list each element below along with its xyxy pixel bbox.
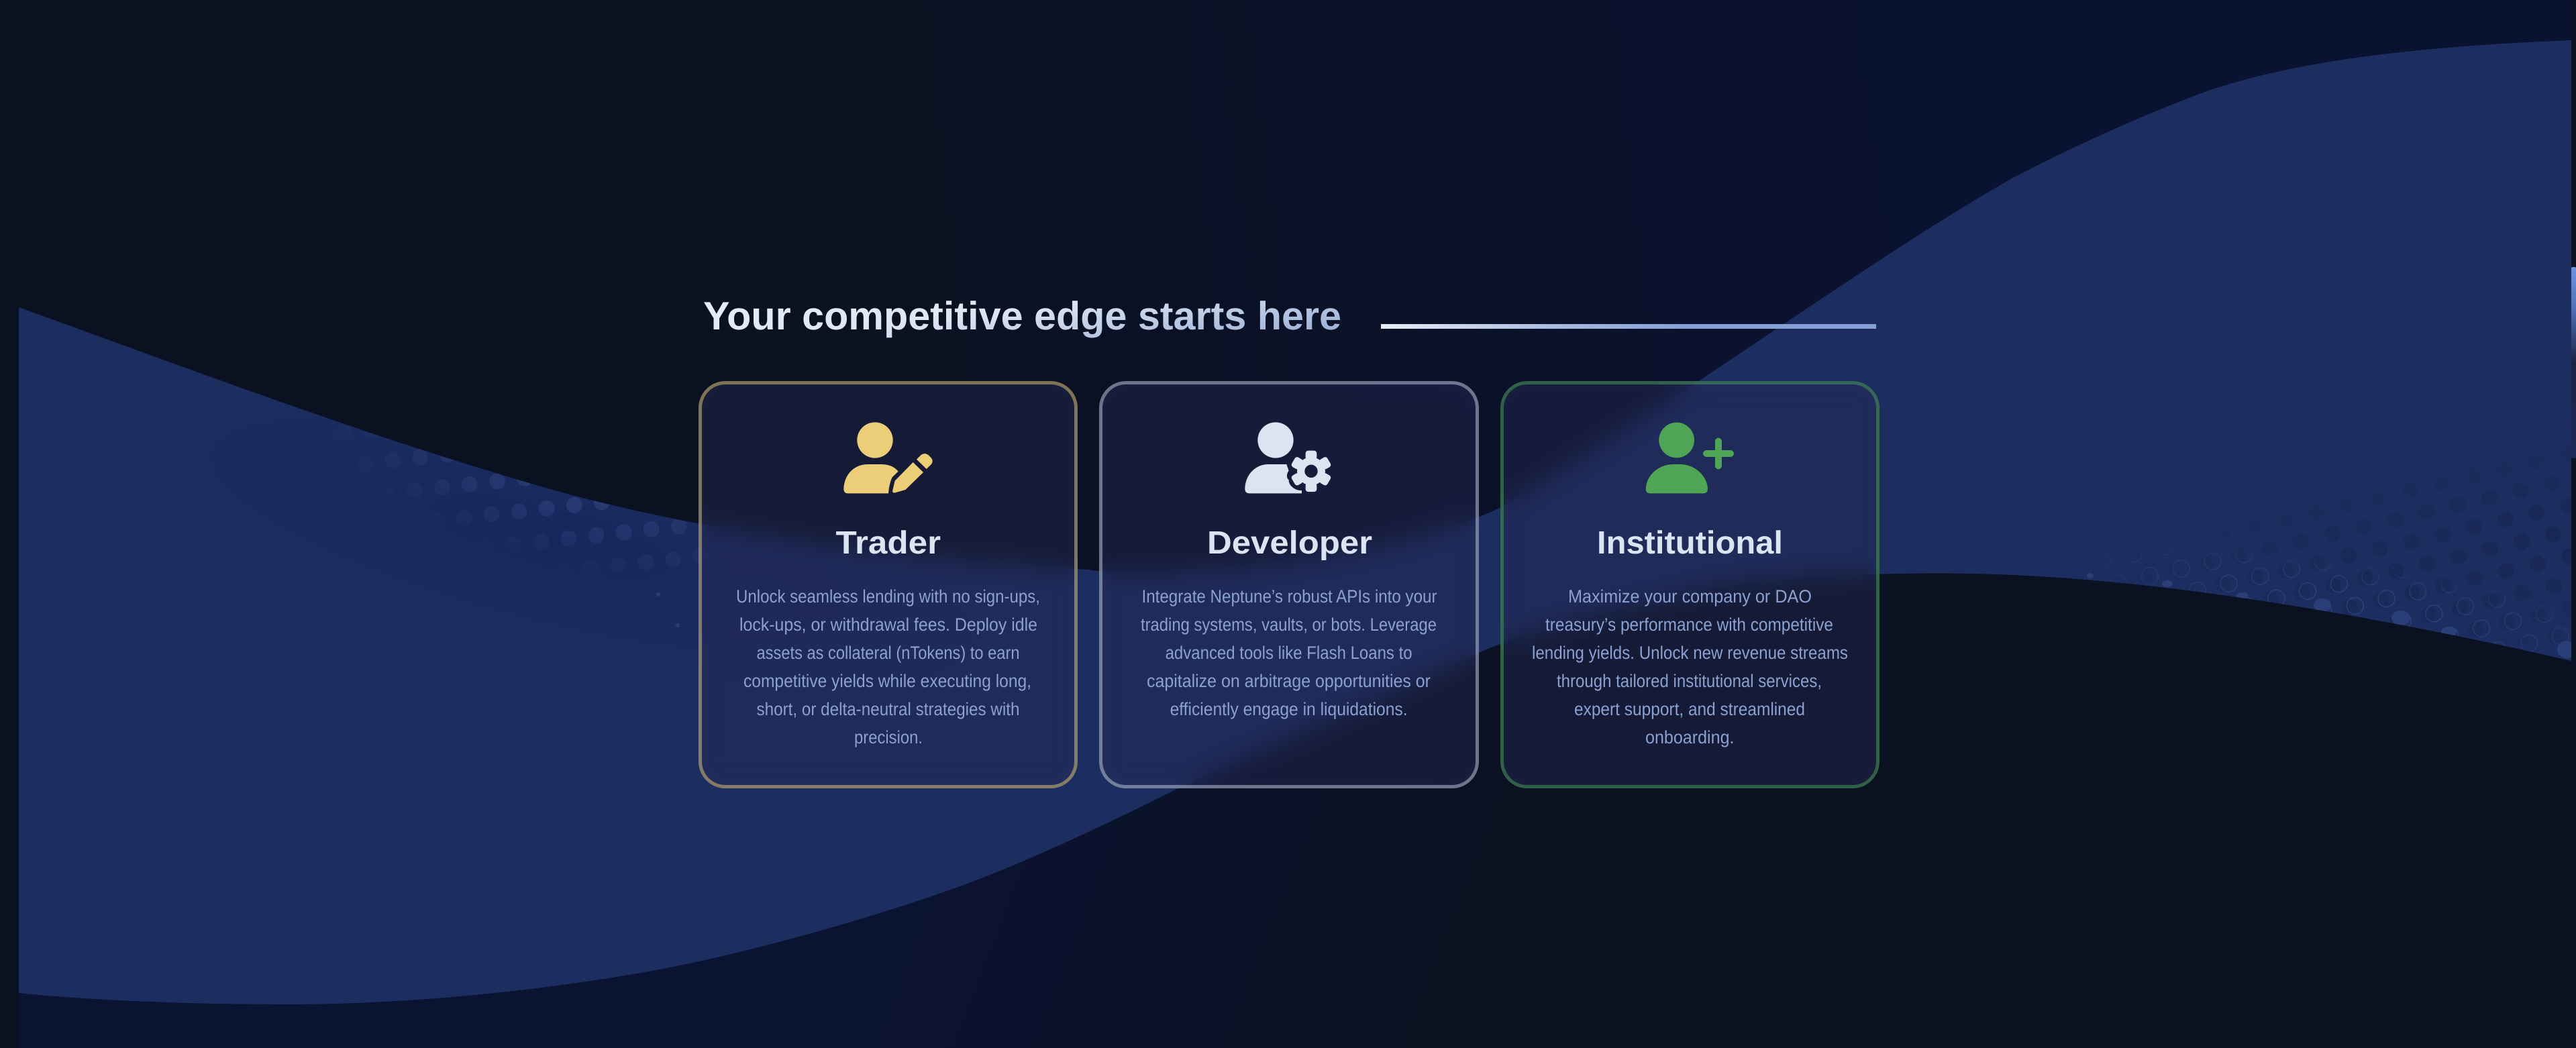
text block: Trader description (736, 586, 1040, 747)
panel: Institutional (1500, 381, 1879, 788)
text block: Developer description: advanced tools like Flash Loans to (1166, 643, 1412, 663)
text block: Trader description: Unlock seamless lending with no sign-ups, (736, 586, 1040, 607)
text block: Institutional description (1532, 586, 1848, 747)
icon: person with pencil (843, 422, 933, 493)
heading: Institutional: Institutional (1597, 525, 1783, 561)
text block: Developer description: capitalize on arbitrage opportunities or (1147, 671, 1431, 691)
text block: Institutional description: onboarding. (1645, 727, 1734, 747)
text block: Trader description: lock-ups, or withdrawal fees. Deploy idle (739, 615, 1037, 635)
text block: Institutional description: Maximize your company or DAO (1568, 586, 1812, 607)
text block: Institutional description: lending yields. Unlock new revenue streams (1532, 643, 1848, 663)
panel: Developer (1099, 381, 1479, 788)
text block: Trader description: competitive yields while executing long, (743, 671, 1031, 691)
text block: Institutional description: through tailored institutional services, (1557, 671, 1822, 691)
text block: Trader description: assets as collateral (nTokens) to earn (757, 643, 1020, 663)
title: Your competitive edge starts here (703, 294, 1341, 338)
text block: Institutional description: treasury’s performance with competitive (1545, 615, 1833, 635)
text block: Developer description (1141, 586, 1437, 719)
text block: Developer description: efficiently engage in liquidations. (1170, 699, 1408, 719)
icon: person with gear (1245, 422, 1332, 493)
title accent line (1381, 324, 1876, 329)
icon: person with plus (1646, 423, 1734, 493)
heading: Developer: Developer (1207, 525, 1372, 561)
heading: Trader: Trader (836, 525, 941, 561)
text block: Institutional description: expert support, and streamlined (1574, 699, 1805, 719)
panel: Trader (699, 381, 1078, 788)
text block: Developer description: Integrate Neptune’s robust APIs into your (1142, 586, 1437, 607)
text block: Trader description: short, or delta-neutral strategies with (757, 699, 1020, 719)
text block: Developer description: trading systems, vaults, or bots. Leverage (1141, 615, 1437, 635)
text block: Trader description: precision. (854, 727, 923, 747)
